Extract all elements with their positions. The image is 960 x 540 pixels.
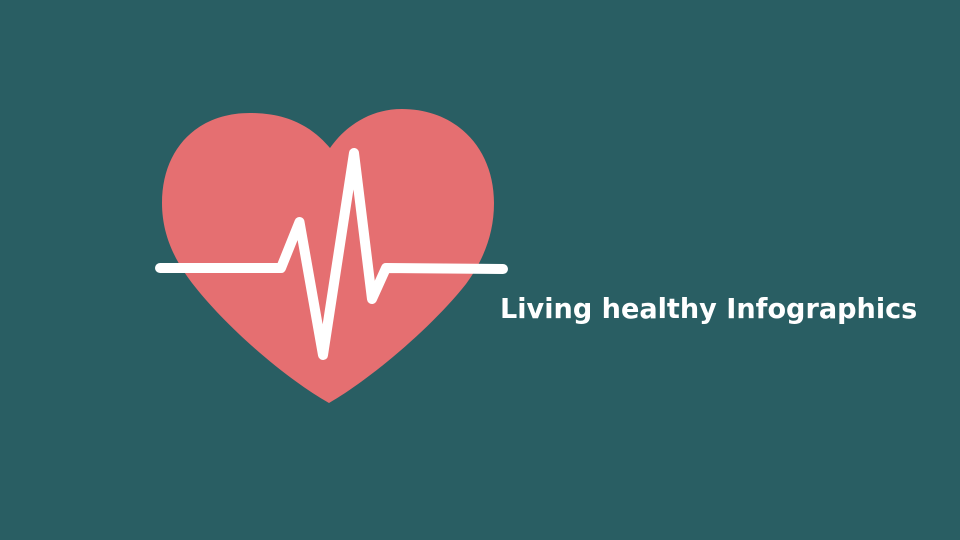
icon: heart <box>162 109 494 403</box>
icon: pulse line <box>160 153 503 355</box>
title: Living healthy Infographics <box>500 292 917 325</box>
